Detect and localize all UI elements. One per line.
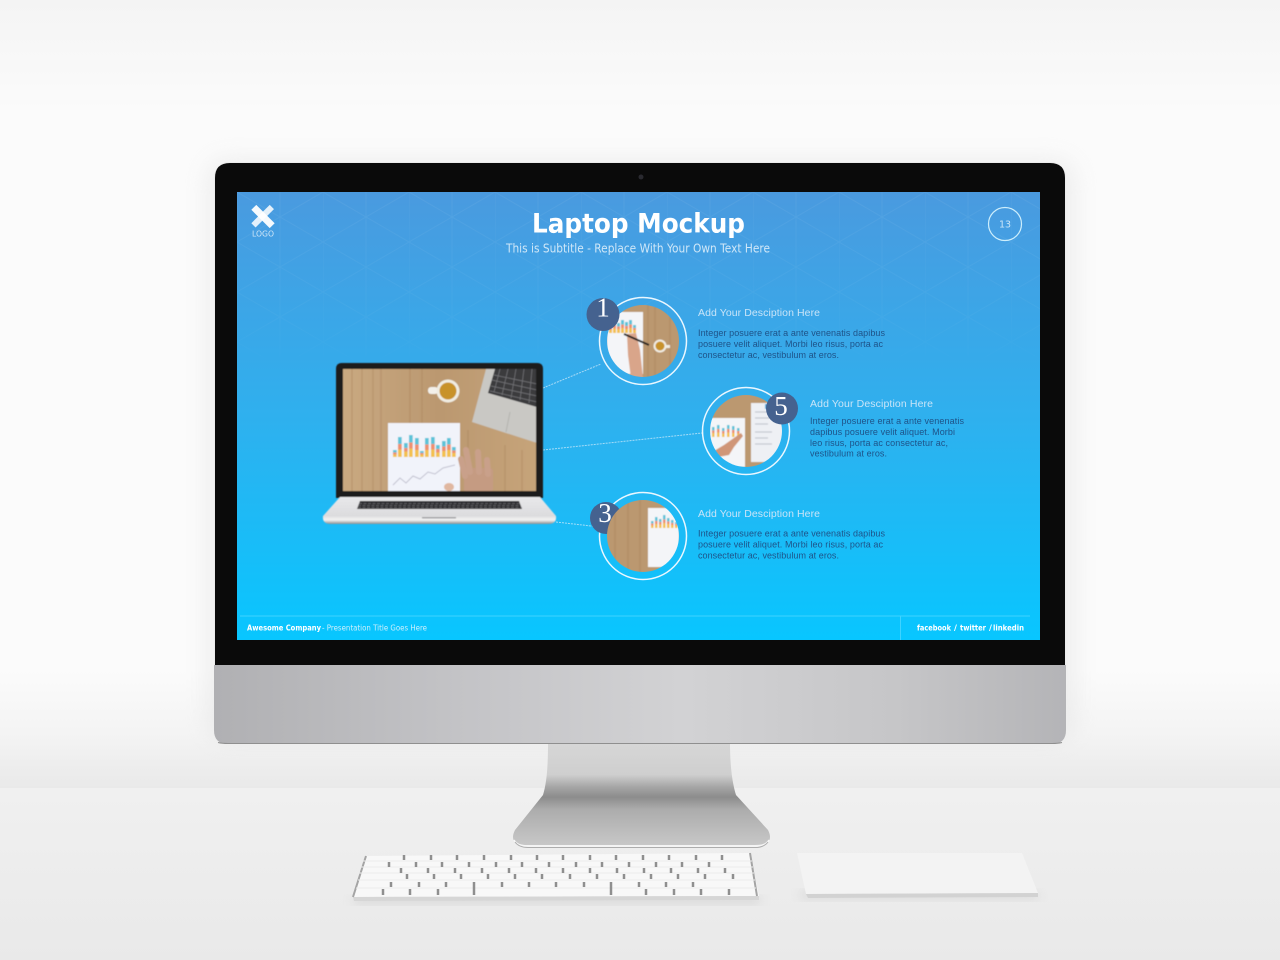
item 3 body: consectetur ac, vestibulum at eros. — [698, 550, 839, 560]
laptop photo — [343, 369, 537, 492]
item 5 heading: Add Your Desciption Here — [810, 398, 933, 410]
logo — [251, 205, 275, 238]
key row lines — [356, 861, 756, 888]
monitor stand — [513, 742, 770, 848]
item 3 ring — [600, 492, 686, 580]
laptop illustration — [323, 363, 556, 524]
webcam — [638, 174, 644, 180]
item 1 body: Integer posuere erat a ante venenatis dapibus — [698, 328, 886, 338]
item 3 photo — [606, 499, 680, 573]
item 1 heading: Add Your Desciption Here — [698, 307, 820, 319]
laptop keyboard — [357, 501, 522, 509]
badge 3: 3 — [598, 498, 612, 528]
badge 3 — [590, 498, 622, 534]
trackpad — [797, 853, 1040, 900]
page number ring — [988, 208, 1022, 240]
item 1 body — [698, 328, 886, 360]
item 5 photo — [709, 394, 783, 468]
item 3 — [590, 492, 886, 580]
desk surface — [0, 788, 1280, 960]
item 1 body: posuere velit aliquet. Morbi leo risus, porta ac — [698, 339, 884, 349]
monitor bezel — [215, 163, 1065, 665]
page number — [988, 208, 1022, 240]
keyboard — [352, 853, 760, 904]
coffee cup — [428, 380, 460, 402]
item 3 heading: Add Your Desciption Here — [698, 508, 820, 520]
slide background — [237, 192, 1040, 640]
item 5 body: vestibulum at eros. — [810, 448, 887, 458]
subtitle: This is Subtitle - Replace With Your Own Text Here — [505, 242, 770, 256]
keyboard sides — [353, 853, 757, 897]
item 3 body — [698, 528, 886, 560]
paper chart — [388, 423, 460, 491]
hand — [444, 450, 493, 492]
item 3 body: posuere velit aliquet. Morbi leo risus, porta ac — [698, 540, 884, 550]
footer presentation title: - Presentation Title Goes Here — [322, 624, 427, 632]
footer company: Awesome Company — [247, 624, 322, 632]
badge 5 — [766, 391, 798, 424]
footer social links: / — [989, 624, 992, 632]
footer social links — [917, 624, 1024, 632]
item 5 — [702, 388, 964, 474]
monitor — [214, 162, 1066, 744]
footer social links: / — [954, 624, 957, 632]
badge 1: 1 — [596, 292, 610, 322]
item 3 text — [698, 508, 886, 560]
monitor soft shadow — [208, 160, 1074, 740]
item 5 ring — [702, 388, 790, 474]
logo label: LOGO — [252, 230, 274, 238]
footer social links: facebook — [917, 624, 952, 632]
footer — [240, 616, 1030, 640]
trackpad notch — [422, 517, 456, 518]
item 5 body — [810, 416, 964, 458]
footer social links: twitter — [960, 624, 986, 632]
connector lines — [543, 364, 702, 527]
laptop base — [323, 497, 556, 524]
page number text: 13 — [999, 220, 1011, 230]
item 1 text — [698, 307, 886, 360]
item 3 body: Integer posuere erat a ante venenatis dapibus — [698, 528, 886, 538]
key gaps — [383, 855, 733, 895]
item 1 ring — [600, 298, 686, 384]
icon: crossed pencil and ruler — [251, 205, 275, 228]
item 5 body: dapibus posuere velit aliquet. Morbi — [810, 427, 955, 437]
footer social links: linkedin — [993, 624, 1024, 632]
grey laptop in photo — [472, 369, 537, 443]
triangle pattern — [237, 192, 1040, 226]
slide screen — [237, 192, 1040, 640]
title: Laptop Mockup — [532, 208, 745, 240]
monitor body outline — [214, 162, 1066, 744]
badge 1 — [586, 292, 620, 331]
keyboard shadow — [352, 896, 760, 904]
item 1 — [586, 292, 886, 384]
monitor chin — [214, 665, 1066, 744]
badge 5: 5 — [774, 391, 788, 421]
item 5 body: leo risus, porta ac consectetur ac, — [810, 438, 948, 448]
item 1 body: consectetur ac, vestibulum at eros. — [698, 350, 839, 360]
item 5 text — [810, 398, 964, 458]
item 1 photo — [606, 304, 680, 378]
laptop lid — [336, 363, 543, 498]
item 5 body: Integer posuere erat a ante venenatis — [810, 416, 964, 426]
keyboard body — [353, 853, 759, 897]
